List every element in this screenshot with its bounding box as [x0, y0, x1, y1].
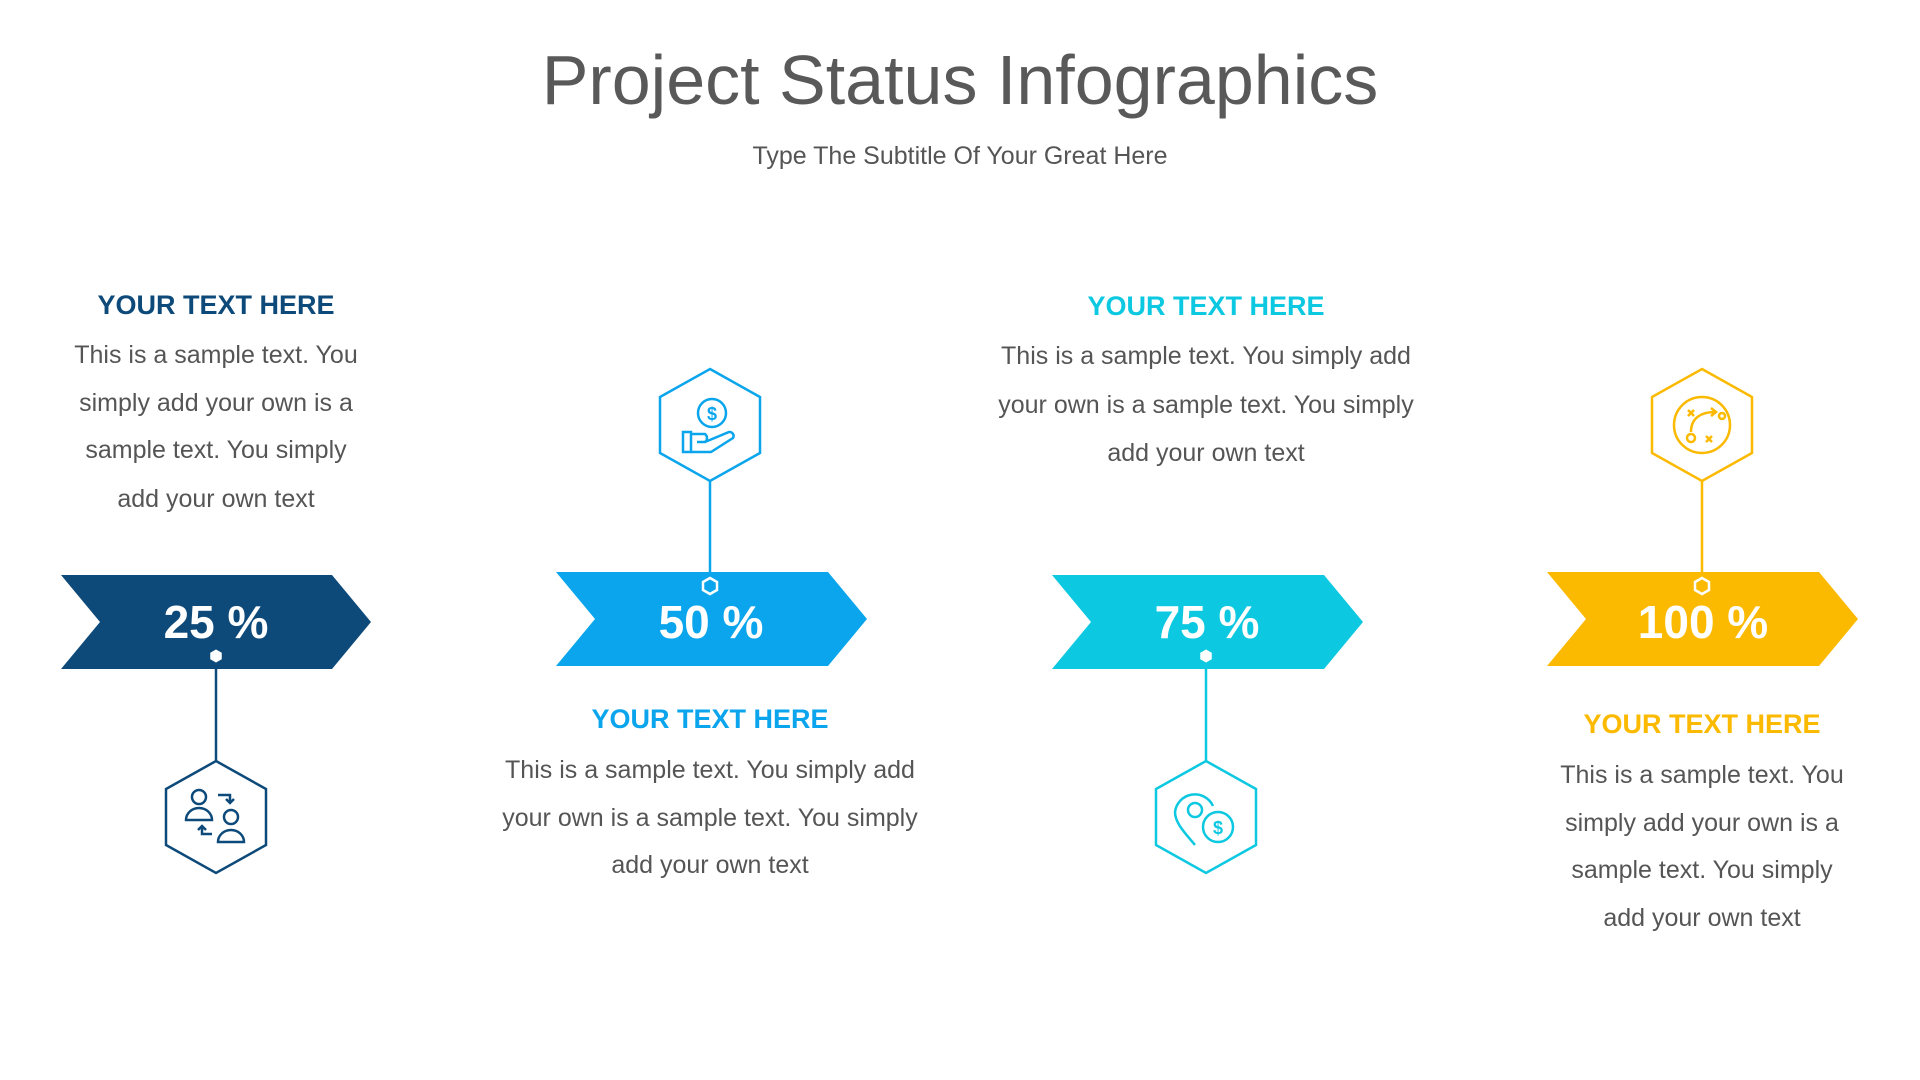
text block 2: YOUR TEXT HERE [591, 704, 829, 734]
chevron 25%: 25 % [164, 596, 268, 648]
text block 3: add your own text [1107, 439, 1305, 467]
panel: 100% [1547, 369, 1858, 932]
connector 1 [209, 648, 223, 761]
text block 2: add your own text [611, 851, 809, 879]
chevron 100%: 100 % [1638, 596, 1768, 648]
text block 2 [502, 704, 918, 879]
chevron 100% [1547, 572, 1858, 666]
title: Project Status Infographics [542, 41, 1378, 119]
text block 1: simply add your own is a [79, 389, 353, 417]
icon: people exchange [166, 761, 266, 873]
text block 1 [74, 290, 358, 513]
text block 3: YOUR TEXT HERE [1087, 291, 1325, 321]
text block 4: add your own text [1603, 904, 1801, 932]
chevron 50% [556, 572, 867, 666]
text block 1: sample text. You simply [85, 436, 347, 464]
icon: location money: $ [1213, 818, 1223, 838]
chevron 25% [61, 575, 371, 669]
text block 1: This is a sample text. You [74, 341, 358, 369]
icon: money hand [660, 369, 760, 481]
text block 3 [998, 291, 1414, 467]
icon: location money [1156, 761, 1256, 873]
text block 1: add your own text [117, 485, 315, 513]
connector 3 [1199, 648, 1213, 761]
icon: money hand: $ [707, 404, 717, 424]
text block 4 [1560, 709, 1844, 932]
connector 4 [1701, 481, 1703, 578]
text block 4: simply add your own is a [1565, 809, 1839, 837]
chevron 75%: 75 % [1155, 596, 1259, 648]
text block 2: This is a sample text. You simply add [505, 756, 915, 784]
text block 3: This is a sample text. You simply add [1001, 342, 1411, 370]
icon: strategy [1652, 369, 1752, 481]
text block 2: your own is a sample text. You simply [502, 804, 918, 832]
panel: 75% [998, 291, 1414, 873]
panel: 25% [61, 290, 371, 873]
chevron 50%: 50 % [659, 596, 763, 648]
chevron 75% [1052, 575, 1363, 669]
connector 2 [703, 481, 717, 594]
text block 4: This is a sample text. You [1560, 761, 1844, 789]
subtitle: Type The Subtitle Of Your Great Here [752, 142, 1168, 170]
text block 4: YOUR TEXT HERE [1583, 709, 1821, 739]
text block 4: sample text. You simply [1571, 856, 1833, 884]
text block 3: your own is a sample text. You simply [998, 391, 1414, 419]
panel: 50% [502, 369, 918, 879]
text block 1: YOUR TEXT HERE [97, 290, 335, 320]
